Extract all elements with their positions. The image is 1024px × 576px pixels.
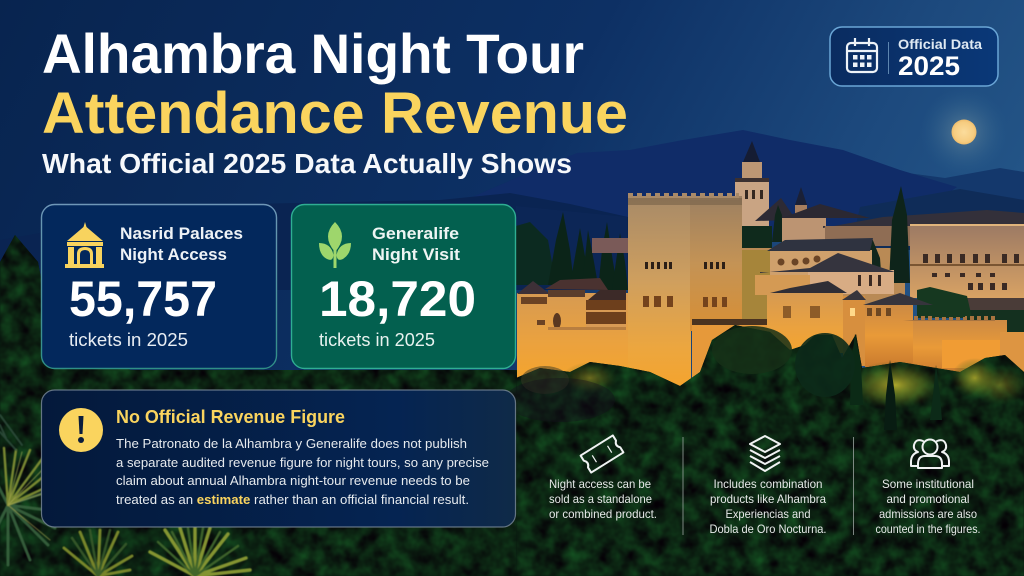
- alhambra: palace of Charles V: [742, 186, 1024, 334]
- note text: or combined product.: [549, 507, 657, 521]
- note text: Dobla de Oro Nocturna.: [710, 522, 826, 536]
- badge label: Official Data: [898, 36, 982, 52]
- alhambra: main keep tower: [628, 193, 767, 386]
- moon: [920, 88, 1008, 176]
- title line: Alhambra Night Tour: Alhambra Night Tour: [42, 22, 584, 85]
- callout body: [116, 436, 489, 507]
- subtitle: What Official 2025 Data Actually Shows: [42, 148, 572, 179]
- note text: sold as a standalone: [549, 492, 652, 506]
- alhambra: church tower: [735, 141, 772, 256]
- card heading: Generalife: [372, 224, 459, 243]
- card value: 55,757: [69, 271, 217, 327]
- palm: centre: [64, 530, 132, 576]
- card heading: [372, 224, 460, 264]
- callout heading: No Official Revenue Figure: [116, 407, 345, 427]
- panel: generalife: [292, 204, 516, 368]
- background: left trees: [0, 225, 525, 576]
- icon: people: [911, 440, 949, 468]
- alhambra: cypress trees behind: [516, 212, 628, 290]
- palm: right: [150, 526, 250, 576]
- alhambra: left wing: [517, 278, 628, 378]
- alhambra: distant pavilion: [592, 238, 628, 253]
- background: mountains: [0, 130, 1024, 290]
- note: combination products: [710, 436, 826, 536]
- note text: counted in the figures.: [876, 522, 980, 536]
- icon: ticket: [581, 435, 623, 473]
- lit foliage: [505, 326, 1024, 430]
- alhambra: right curtain wall: [903, 305, 1024, 375]
- note text: Includes combination: [714, 477, 822, 491]
- note text: [549, 477, 657, 521]
- icon: calendar: [847, 38, 877, 72]
- note text: Experiencias and: [726, 507, 810, 521]
- note text: [710, 477, 826, 536]
- callout body: The Patronato de la Alhambra y Generalife does not publish: [116, 436, 467, 451]
- badge: official data 2025: [830, 27, 998, 86]
- icon: temple: [65, 222, 104, 268]
- card caption: tickets in 2025: [319, 330, 435, 350]
- title line: Attendance Revenue: Attendance Revenue: [42, 81, 628, 146]
- card heading: Night Visit: [372, 245, 460, 264]
- palm: left: [0, 415, 62, 565]
- card heading: [120, 224, 243, 264]
- icon: sprout: [319, 222, 351, 268]
- note text: Some institutional: [882, 477, 974, 491]
- note: institutional admissions: [876, 440, 980, 536]
- note text: products like Alhambra: [710, 492, 826, 506]
- panel: no official revenue figure: [42, 390, 516, 527]
- callout body: treated as an estimate rather than an official financial result.: [116, 492, 469, 507]
- callout body: a separate audited revenue figure for night tours, so any precise: [116, 455, 489, 470]
- note text: [876, 477, 980, 536]
- card heading: Night Access: [120, 245, 227, 264]
- alhambra: middle buildings: [742, 238, 933, 367]
- callout body: claim about annual Alhambra night-tour revenue needs to be: [116, 473, 470, 488]
- icon: warning: [59, 408, 103, 452]
- note text: admissions are also: [879, 507, 977, 521]
- foreground: palm fronds: [0, 415, 250, 576]
- card value: 18,720: [319, 271, 476, 327]
- title: [42, 22, 628, 179]
- note text: and promotional: [886, 492, 970, 506]
- panel: nasrid palaces: [42, 204, 276, 368]
- icon: stacked layers: [750, 436, 780, 471]
- note text: Night access can be: [549, 477, 651, 491]
- foreground: trees below the castle: [505, 320, 1024, 576]
- badge year: 2025: [898, 51, 960, 81]
- card heading: Nasrid Palaces: [120, 224, 243, 243]
- note: standalone product: [549, 435, 657, 521]
- card caption: tickets in 2025: [69, 330, 188, 350]
